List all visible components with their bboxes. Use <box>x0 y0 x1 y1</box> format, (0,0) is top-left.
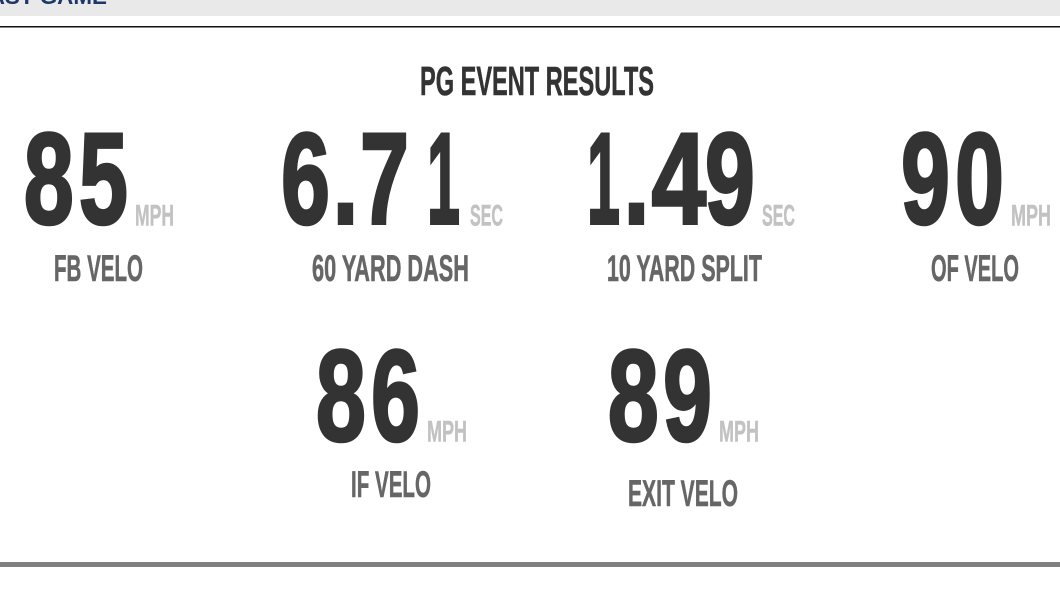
stat: exit velo: 8 <box>608 322 659 468</box>
stat: 60 yard dash <box>281 106 503 289</box>
stat: FB velo: 8 <box>24 106 74 252</box>
stat: OF velo: 0 <box>955 106 1004 252</box>
stat: IF velo: 6 <box>371 322 420 468</box>
stat: 60 yard dash: 6 <box>281 106 330 252</box>
stat: 10 yard split: . <box>624 106 650 252</box>
bottom rule <box>0 562 1060 567</box>
title: PG EVENT RESULTS <box>420 58 654 104</box>
top header band <box>0 0 1060 16</box>
stat: IF velo: IF VELO <box>351 464 431 505</box>
stat: 10 yard split: 10 YARD SPLIT <box>607 248 762 289</box>
stat: IF velo: MPH <box>427 416 467 448</box>
header divider line <box>0 26 1060 28</box>
stat: OF velo <box>901 106 1051 289</box>
stat: FB velo: MPH <box>135 200 174 232</box>
stat: 60 yard dash: . <box>332 106 358 252</box>
stat: OF velo: 9 <box>901 106 950 252</box>
stat: 10 yard split <box>587 106 795 289</box>
stat: 60 yard dash: 60 YARD DASH <box>312 248 469 289</box>
stat: IF velo: 8 <box>316 322 366 468</box>
stat: 60 yard dash: 1 <box>427 106 460 252</box>
stat: 10 yard split: SEC <box>762 200 795 232</box>
stat: FB velo <box>24 106 174 289</box>
stat: exit velo: EXIT VELO <box>628 473 738 514</box>
stat: FB velo: FB VELO <box>54 248 143 289</box>
stat: exit velo <box>608 322 759 514</box>
stat: 60 yard dash: SEC <box>470 200 503 232</box>
stat: 10 yard split: 1 <box>587 106 620 252</box>
stat: exit velo: 9 <box>663 322 712 468</box>
stat: 10 yard split: 9 <box>705 106 755 252</box>
stat: IF velo <box>316 322 467 505</box>
stat: 60 yard dash: 7 <box>360 106 409 252</box>
stat: 10 yard split: 4 <box>652 106 706 252</box>
stat: FB velo: 5 <box>79 106 128 252</box>
stat: exit velo: MPH <box>719 416 759 448</box>
